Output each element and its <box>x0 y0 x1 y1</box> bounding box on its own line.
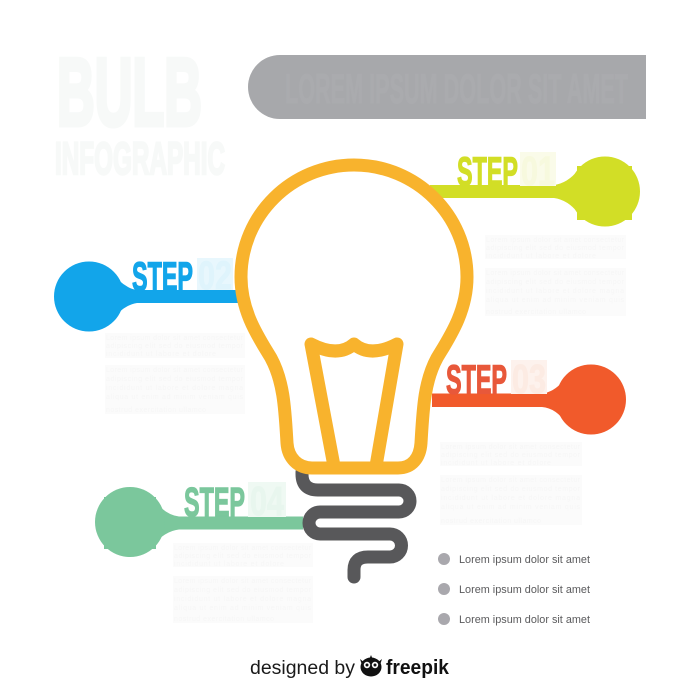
bulb outline <box>241 165 467 468</box>
step text: incididunt ut labore et dolore <box>441 460 551 467</box>
subtitle: INFOGRAPHIC: INFOGRAPHIC <box>55 133 225 184</box>
step text: incididunt ut labore et dolore magna <box>174 596 311 603</box>
step text: incididunt ut labore et dolore <box>106 351 216 358</box>
step text: nostrud exercitation ullamco <box>106 407 206 414</box>
step text <box>105 333 245 414</box>
step text: Lorem ipsum dolor sit amet consectetur <box>106 367 244 374</box>
footer credit: designed by <box>250 658 356 679</box>
step number: 01 <box>521 148 555 194</box>
step text: incididunt ut labore et dolore <box>174 561 284 568</box>
step label: STEP <box>446 356 507 402</box>
step text: adipiscing elit sed do eiusmod tempor <box>106 376 244 383</box>
footer credit: freepik <box>386 657 450 679</box>
step number: 04 <box>250 478 284 524</box>
step text: Lorem ipsum dolor sit amet consectetur <box>486 270 625 277</box>
step text: incididunt ut labore et dolore magna <box>486 288 624 295</box>
step text: adipiscing elit sed do eiusmod tempor <box>174 553 312 560</box>
step label: STEP <box>457 148 518 194</box>
step text: adipiscing elit sed do eiusmod tempor <box>486 279 625 286</box>
step text: Lorem ipsum dolor sit amet consectetur <box>441 477 581 484</box>
title: BULB: BULB <box>57 39 202 146</box>
bullet 3: Lorem ipsum dolor sit amet <box>459 614 590 626</box>
icon: bulb coil <box>302 472 410 577</box>
step text: Lorem ipsum dolor sit amet consectetur <box>486 237 625 244</box>
icon: freepik mascot <box>360 655 382 676</box>
bulb filament <box>311 344 397 466</box>
step text: nostrud exercitation ullamco <box>174 616 274 623</box>
connector and node <box>95 487 303 557</box>
step text: adipiscing elit sed do eiusmod tempor <box>486 245 625 252</box>
connector and node <box>54 262 238 332</box>
step text <box>485 235 626 316</box>
panel: step 03 <box>432 356 626 525</box>
panel: step 01 <box>430 148 640 316</box>
step text: adipiscing elit sed do eiusmod tempor <box>441 452 581 459</box>
step text: Lorem ipsum dolor sit amet consectetur <box>174 578 312 585</box>
bullet 2: Lorem ipsum dolor sit amet <box>459 584 590 596</box>
connector and node <box>430 156 640 226</box>
bullet list <box>438 553 590 626</box>
step text: nostrud exercitation ullamco <box>486 309 586 316</box>
step text: adipiscing elit sed do eiusmod tempor <box>106 343 244 350</box>
step number: 02 <box>198 254 232 298</box>
step text: Lorem ipsum dolor sit amet consectetur <box>174 545 312 552</box>
step text: Lorem ipsum dolor sit amet consectetur <box>441 444 581 451</box>
step text <box>173 543 313 623</box>
step text: aliqua ut enim ad minim veniam quis <box>441 504 580 511</box>
panel: step 04 <box>95 478 313 623</box>
step text: nostrud exercitation ullamco <box>441 518 541 525</box>
step text: aliqua ut enim ad minim veniam quis <box>106 394 244 401</box>
footer credit <box>250 655 450 679</box>
step text: adipiscing elit sed do eiusmod tempor <box>441 486 581 493</box>
header banner <box>248 55 646 119</box>
step number: 03 <box>512 356 546 402</box>
icon: light bulb <box>241 165 467 468</box>
bullet 1: Lorem ipsum dolor sit amet <box>459 554 590 566</box>
step text: aliqua ut enim ad minim veniam quis <box>174 605 312 612</box>
panel: step 02 <box>54 254 245 414</box>
step text: Lorem ipsum dolor sit amet consectetur <box>106 335 244 342</box>
step text: adipiscing elit sed do eiusmod tempor <box>174 587 312 594</box>
step text: incididunt ut labore et dolore magna <box>441 495 580 502</box>
connector and node <box>432 364 626 434</box>
step text: aliqua ut enim ad minim veniam quis <box>486 297 624 304</box>
step text <box>440 442 582 525</box>
step label: STEP <box>132 254 193 300</box>
step text: incididunt ut labore et dolore magna <box>106 385 243 392</box>
step text: incididunt ut labore et dolore <box>486 253 596 260</box>
step label: STEP <box>184 479 245 525</box>
